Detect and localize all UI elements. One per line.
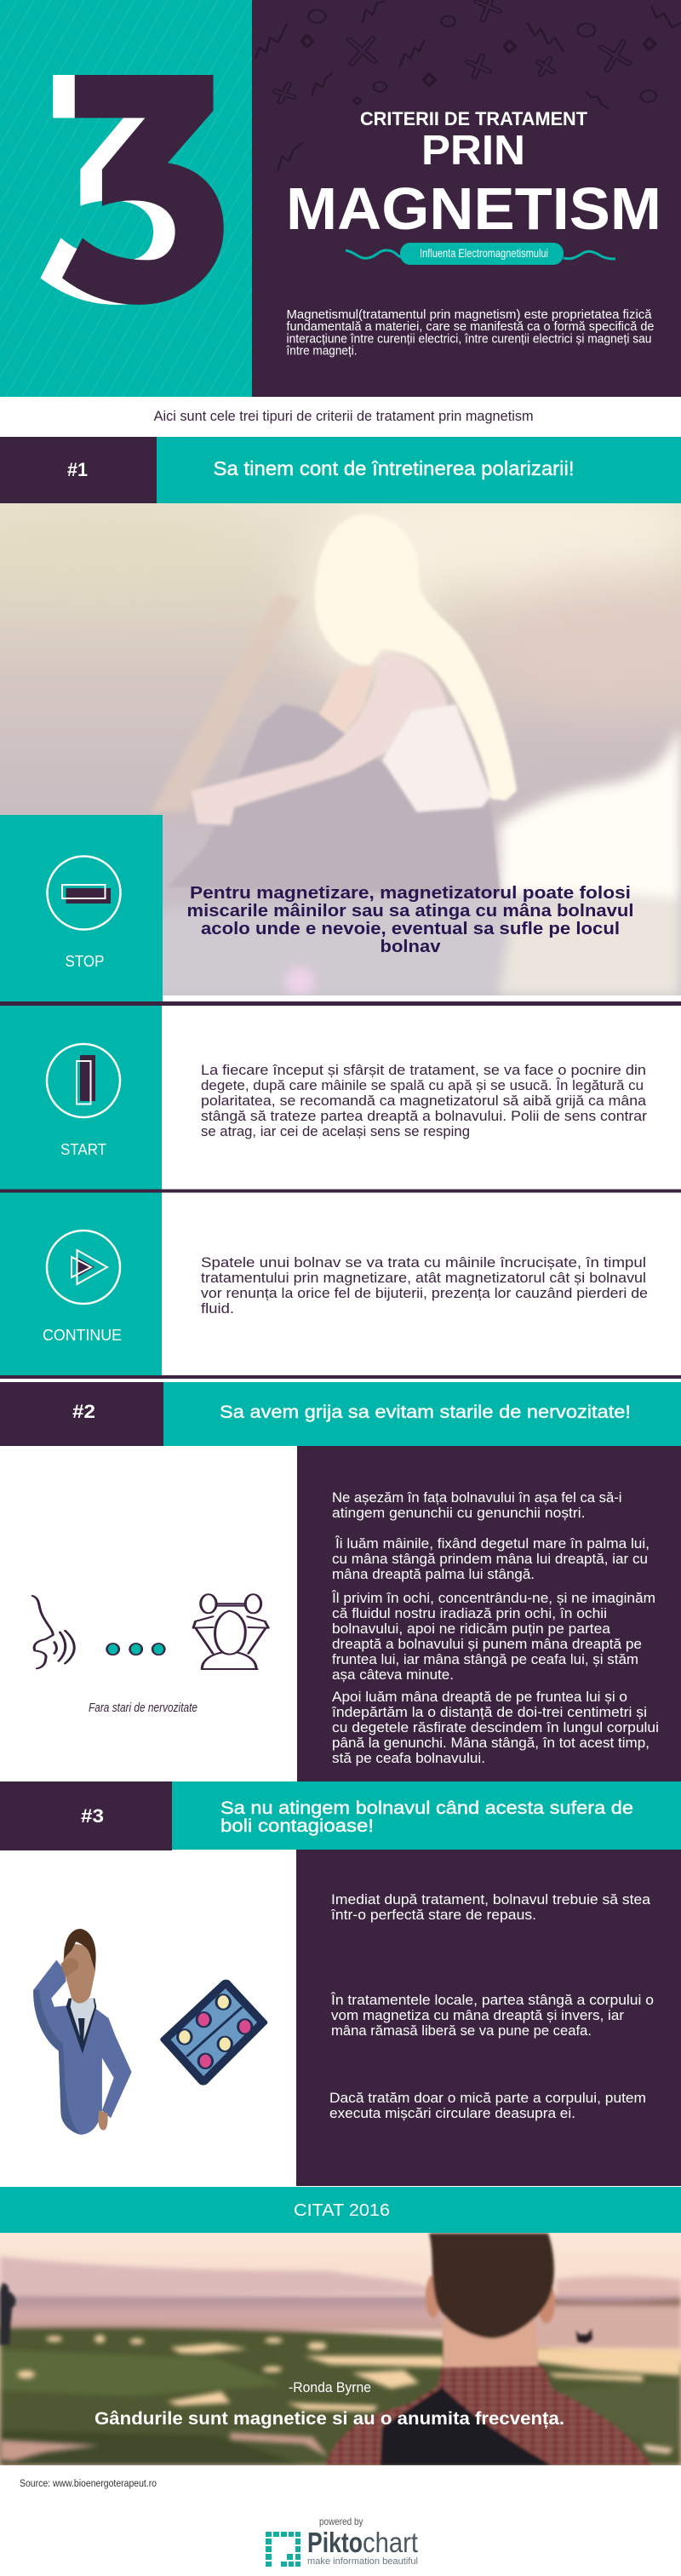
panel 3 paragraphs: Dacă tratăm doar o mică parte a corpului, putem [329, 2091, 646, 2106]
decorative scribbles [255, 0, 681, 170]
banner 3: #3 [81, 1805, 104, 1827]
heading line 1: CRITERII DE TRATAMENT [360, 108, 588, 129]
banner 2 [0, 1382, 681, 1446]
panel 2 paragraphs: că fluidul nostru iradiază prin ochi, în ochii [332, 1606, 607, 1621]
quote banner [0, 2187, 681, 2233]
panel 2 paragraphs: Îi luăm mâinile, fixând degetul mare în palma lui, [335, 1535, 650, 1552]
banner 3 [0, 1781, 681, 1850]
panel 2 text background [297, 1446, 681, 1781]
banner 1: Sa tinem cont de întretinerea polarizarii! [213, 457, 574, 479]
subtitle badge with waves [346, 243, 615, 265]
photo: man looking at the sea [0, 2233, 681, 2465]
stop paragraph on photo: miscarile mâinilor sau sa atinga cu mâna bolnavul [187, 901, 633, 921]
panel 2 paragraphs: mâna dreaptă palma lui stângă. [332, 1567, 535, 1582]
panel 2 paragraphs: cu mâna stângă prindem mâna lui dreaptă, iar cu [332, 1552, 648, 1567]
continue paragraph [201, 1255, 648, 1317]
panel 2 paragraphs: Ne așezăm în fața bolnavului în așa fel ca să-i [332, 1490, 621, 1506]
panel 2 paragraphs: Îl privim în ochi, concentrându-ne, și ne imaginăm [331, 1590, 655, 1606]
hero paragraph [286, 307, 654, 358]
banner 3: boli contagioase! [220, 1816, 374, 1836]
top [382, 704, 491, 812]
panel 2 paragraphs: stă pe ceafa bolnavului. [332, 1751, 485, 1766]
continue box [0, 1192, 162, 1375]
stop paragraph on photo [187, 883, 633, 956]
banner 2: Sa avem grija sa evitam starile de nervozitate! [220, 1402, 631, 1422]
hero: teal panel with big number [0, 0, 252, 397]
photo: woman sitting by the water [0, 476, 681, 996]
start paragraph: stângă să trateze partea dreaptă a bolnavului. Polii de sens contrar [201, 1109, 648, 1124]
hero paragraph: fundamentală a materiei, care se manifestă ca o formă specifică de [286, 319, 654, 334]
panel 2 paragraphs: fruntea lui, iar mâna stângă pe ceafa lui, și stăm [332, 1652, 638, 1667]
panel 3 paragraphs: Imediat după tratament, bolnavul trebuie să stea [331, 1892, 651, 1908]
quote author: -Ronda Byrne [289, 2379, 371, 2395]
continue paragraph: fluid. [201, 1301, 234, 1317]
icon: logo grid [266, 2532, 300, 2567]
banner 1 [0, 437, 681, 503]
hero: purple title panel [252, 0, 681, 397]
torso and arm [191, 655, 449, 825]
panel 2 paragraphs: dreaptă a bolnavului și punem mâna dreaptă pe [332, 1637, 642, 1652]
panel 3 text background [296, 1850, 681, 2186]
panel 2 paragraphs [331, 1490, 659, 1766]
continue paragraph: tratamentului prin magnetizare, atât magnetizatorul cât și bolnavul [201, 1271, 646, 1286]
stop box [0, 815, 163, 1001]
start paragraph: se atrag, iar cei de același sens se resping [201, 1124, 470, 1139]
caption: Fara stari de nervozitate [89, 1701, 197, 1715]
subtitle badge with waves: Influenta Electromagnetismului [420, 246, 548, 260]
start paragraph: degete, după care mâinile se spală cu apă și se usucă. În legătură cu [201, 1077, 644, 1093]
panel 2 paragraphs: bolnavului, apoi ne ridicăm puțin pe partea [332, 1621, 611, 1637]
heading line 2: PRIN [421, 128, 525, 174]
start paragraph: polaritatea, se recomandă ca magnetizatorul să aibă grijă ca mâna [201, 1093, 647, 1109]
banner 3: Sa nu atingem bolnavul când acesta sufera de [220, 1798, 633, 1818]
quote: Gândurile sunt magnetice si au o anumita frecvența. [94, 2408, 564, 2429]
banner 1: #1 [67, 459, 88, 480]
stop paragraph on photo: acolo unde e nevoie, eventual sa sufle pe locul [201, 919, 620, 938]
panel 2 paragraphs: cu degetele răsfirate descindem în lungul corpului [332, 1720, 659, 1736]
panel 3 paragraphs: mâna rămasă liberă se va pune pe ceafa. [331, 2023, 592, 2039]
skirt [167, 704, 501, 895]
far figure [0, 2283, 592, 2344]
stop box: STOP [65, 952, 104, 970]
footer: piktochart logo: chart [363, 2527, 418, 2558]
stop paragraph on photo: bolnav [380, 937, 441, 956]
source: Source: www.bioenergoterapeut.ro [20, 2479, 157, 2489]
icon: start [47, 1044, 120, 1117]
panel 3 paragraphs: într-o perfectă stare de repaus. [330, 1908, 536, 1923]
footer: piktochart logo: powered by [319, 2516, 363, 2527]
footer: piktochart logo [266, 2516, 418, 2567]
panel 2 paragraphs: așa câteva minute. [332, 1667, 454, 1683]
icon: stop [48, 857, 121, 930]
panel 2 paragraphs: atingem genunchii cu genunchii noștri. [332, 1506, 586, 1521]
panel 3 paragraphs: În tratamentele locale, partea stângă a corpului o [330, 1992, 654, 2008]
start box: START [60, 1140, 106, 1158]
hair [315, 513, 517, 800]
quote banner: CITAT 2016 [294, 2201, 390, 2220]
panel 2 paragraphs: până la genunchi. Mâna stângă, în tot acest timp, [332, 1736, 650, 1751]
panel 3 paragraphs: executa mișcări circulare deasupra ei. [329, 2106, 575, 2121]
stop paragraph on photo: Pentru magnetizare, magnetizatorul poate folosi [190, 883, 631, 903]
footer: piktochart logo: Pikto [307, 2527, 363, 2558]
continue box: CONTINUE [43, 1326, 122, 1344]
start paragraph [201, 1063, 648, 1139]
banner 2: #2 [72, 1401, 95, 1422]
icon: continue [47, 1231, 120, 1304]
big number 3 [40, 75, 224, 305]
start paragraph: La fiecare început și sfârșit de tratament, se va face o pocnire din [201, 1063, 646, 1078]
continue paragraph: Spatele unui bolnav se va trata cu mâinile încrucișate, în timpul [201, 1255, 646, 1271]
footer: piktochart logo: make information beautiful [307, 2556, 418, 2567]
hero paragraph: interacțiune între curenții electrici, între curenții electrici și magneți sau [286, 332, 652, 346]
illustration: pill blister pack [165, 1982, 263, 2082]
hero paragraph: Magnetismul(tratamentul prin magnetism) este proprietatea fizică [286, 307, 652, 322]
panel 3 paragraphs [329, 1892, 654, 2121]
hero paragraph: între magneți. [286, 344, 358, 358]
man: head and shoulders [326, 2234, 651, 2465]
panel 3 paragraphs: vom magnetiza cu mâna dreaptă și invers, iar [331, 2008, 625, 2023]
continue paragraph: vor renunța la orice fel de bijuterii, prezența lor cauzând pierderi de [201, 1286, 648, 1301]
intro line: Aici sunt cele trei tipuri de criterii de tratament prin magnetism [154, 409, 534, 424]
panel 2 paragraphs: Apoi luăm mâna dreaptă de pe fruntea lui și o [332, 1690, 627, 1705]
heading line 3: MAGNETISM [286, 175, 661, 242]
icon: speaking nose, dots and listening person [32, 1594, 268, 1669]
panel 2 paragraphs: îndepărtăm la o distanță de doi-trei centimetri și [331, 1705, 647, 1720]
start box [0, 1006, 162, 1189]
illustration: man with headache [33, 1929, 132, 2135]
